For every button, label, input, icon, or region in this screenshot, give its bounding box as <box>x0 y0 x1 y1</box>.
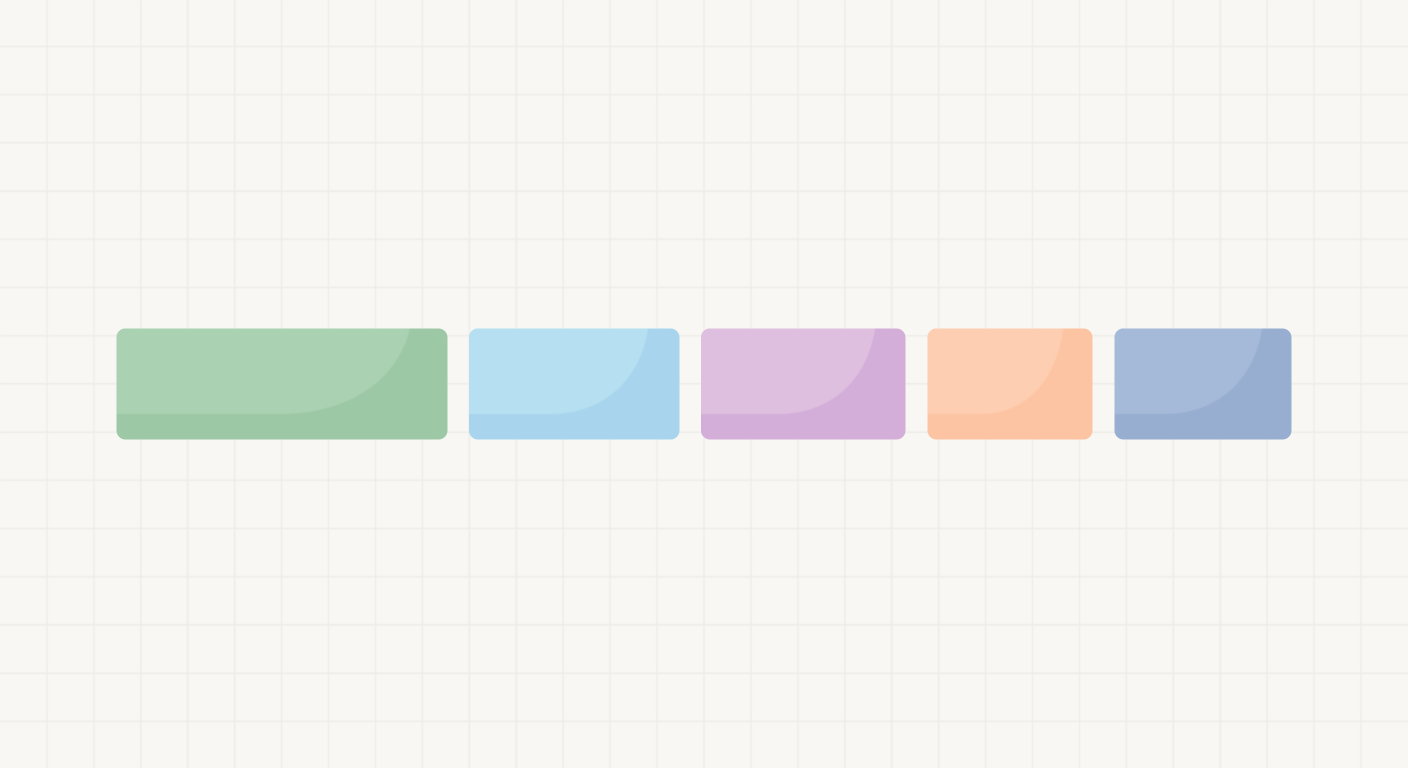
panel: green block <box>110 322 448 440</box>
panel: light blue block <box>462 322 680 440</box>
panel: slate blue block <box>1107 322 1292 440</box>
panel: purple block <box>694 322 906 440</box>
panel: orange block <box>920 322 1092 440</box>
